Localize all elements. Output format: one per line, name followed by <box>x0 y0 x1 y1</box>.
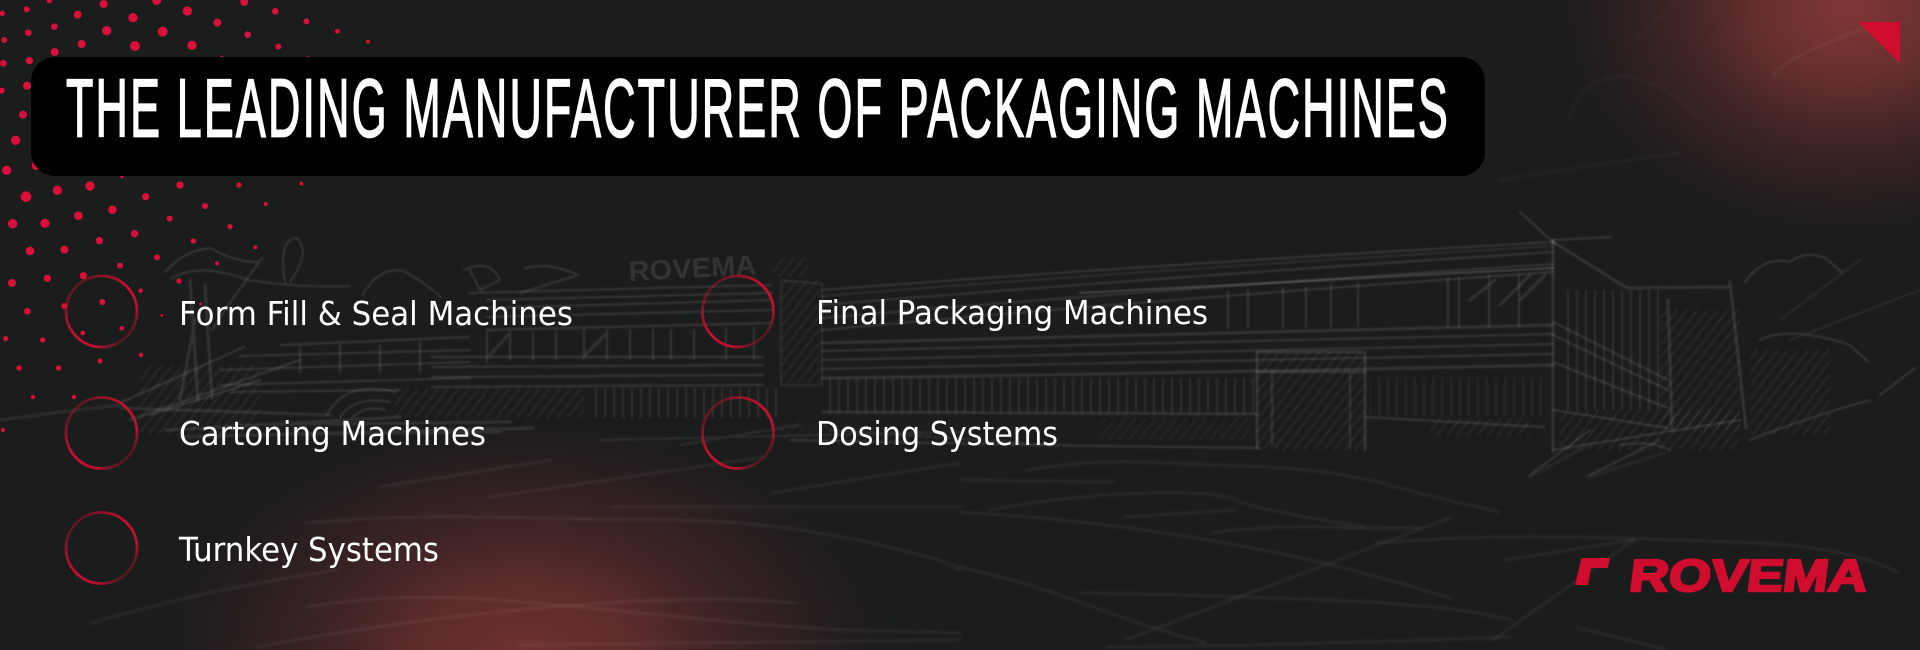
shrubs right of the building <box>1745 255 1842 282</box>
item: Form Fill & Seal Machines <box>66 276 573 347</box>
title banner <box>31 57 1485 176</box>
item: Final Packaging Machines <box>702 276 1208 347</box>
item: Cartoning Machines <box>66 398 486 468</box>
round shrub <box>327 389 395 418</box>
item: Dosing Systems: Dosing Systems <box>816 414 1058 453</box>
item: Final Packaging Machines: Final Packaging Machines <box>816 293 1208 332</box>
trees and shrubs left of the building <box>165 248 262 330</box>
left building window verticals <box>487 328 754 362</box>
list: packaging machine types <box>66 276 1208 584</box>
logo wordmark: ROVEMA <box>1627 550 1871 601</box>
icon: corner triangle <box>1858 22 1900 63</box>
item: Cartoning Machines: Cartoning Machines <box>179 414 486 453</box>
upper window verticals <box>1228 275 1519 328</box>
logo: ROVEMA <box>1575 550 1871 601</box>
item: Dosing Systems <box>702 398 1058 468</box>
sketched ROVEMA sign on the building: ROVEMA <box>628 249 757 287</box>
left building horizontal bands <box>469 285 772 317</box>
ground scribble below the building <box>120 408 533 437</box>
main wing upper band <box>822 242 1553 290</box>
glow: top right <box>1500 0 1920 260</box>
main wing middle band <box>822 325 1553 343</box>
item: Turnkey Systems: Turnkey Systems <box>178 530 439 569</box>
red halftone dot pattern <box>0 0 370 432</box>
item: Turnkey Systems <box>66 512 439 584</box>
hatching and window fills <box>1257 352 1365 450</box>
building corner and right wing <box>1552 240 1554 452</box>
main wing lower lines <box>822 412 1257 414</box>
glow: bottom centre <box>130 400 920 650</box>
tower <box>781 280 822 385</box>
logo mark <box>1575 558 1610 585</box>
item: Form Fill & Seal Machines: Form Fill & Seal Machines <box>179 294 573 333</box>
factory sketch background <box>0 212 1920 475</box>
entrance <box>1257 352 1365 450</box>
